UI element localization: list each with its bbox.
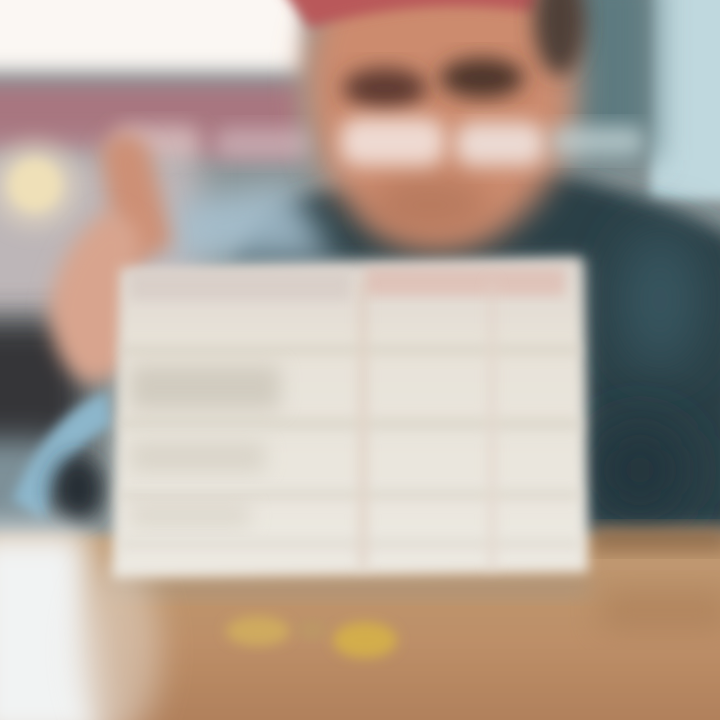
- calendar card: [112, 258, 588, 578]
- calendar grid lines: [120, 280, 580, 570]
- calendar header row: [130, 268, 565, 300]
- lamp glow: [0, 141, 79, 229]
- face: [275, 0, 586, 250]
- calendar smudged text: [130, 365, 280, 527]
- table: [0, 528, 720, 720]
- eyes: [343, 68, 427, 108]
- sleeve: [12, 392, 112, 524]
- coins: [226, 616, 397, 658]
- hand and arm: [48, 132, 172, 385]
- blurred white text over face: [115, 118, 645, 166]
- jacket: [170, 170, 720, 530]
